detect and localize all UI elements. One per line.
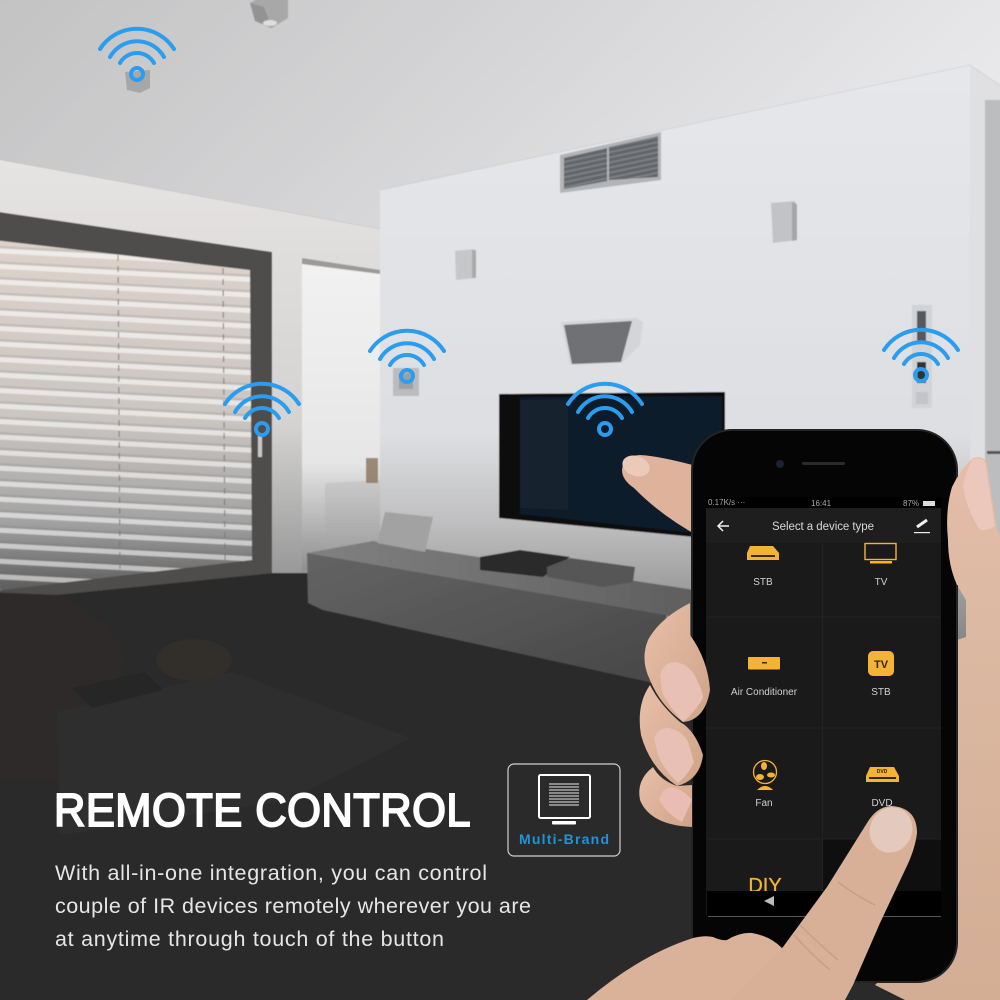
remotes on table: [72, 672, 163, 708]
fingernail 1: [660, 662, 703, 722]
black box: [480, 550, 570, 577]
status bar: [706, 497, 941, 508]
wifi icon: wall panel: [884, 330, 958, 381]
speaker: [802, 462, 845, 465]
badge label: Multi-Brand: [519, 831, 609, 847]
index fingernail: [862, 800, 920, 860]
edit icon: [914, 520, 930, 533]
device: air conditioner: [731, 657, 798, 698]
device: dvd: DVD: [877, 769, 888, 775]
description: [55, 861, 531, 951]
hand: palm behind phone: [875, 457, 1000, 1000]
status bar: 0.17K/s ···: [708, 498, 745, 507]
wifi icon: switch: [370, 331, 444, 382]
description: at anytime through touch of the button: [55, 927, 444, 951]
coffee table: [57, 672, 410, 835]
bowl on table: [156, 639, 232, 681]
upper fingertip: [619, 452, 653, 480]
status bar: 87%: [903, 499, 919, 508]
wifi icon: tv: [568, 384, 642, 435]
grey box: [547, 558, 635, 587]
description: couple of IR devices remotely wherever you are: [55, 894, 531, 918]
wifi icon: window handle: [225, 384, 299, 435]
wall speaker right: [771, 201, 797, 243]
right wall edge and door: [970, 65, 1000, 700]
device: air conditioner: Air Conditioner: [731, 687, 798, 698]
fingernail 3: [659, 787, 692, 822]
device: tv box: STB: [871, 687, 891, 698]
ceiling: [0, 0, 1000, 229]
back arrow: [718, 521, 729, 531]
wifi icon: ceiling light: [100, 29, 174, 93]
ceiling spotlight: [250, 0, 288, 28]
description: With all-in-one integration, you can control: [55, 861, 487, 885]
device: tv box: TV: [874, 659, 889, 671]
device: dvd: DVD: [871, 798, 893, 809]
left wall: [0, 157, 380, 602]
device: fan: Fan: [755, 798, 773, 809]
camera: [776, 460, 784, 468]
hand: pressing index finger: [587, 800, 920, 1000]
phone body: [692, 430, 957, 982]
header title: Select a device type: [772, 521, 874, 533]
icon: monitor: [539, 775, 590, 824]
finger 3: [639, 767, 692, 827]
hand: right finger over phone: [947, 457, 1000, 600]
wall switch panel: [393, 368, 419, 396]
finger creases: [794, 882, 875, 970]
wall speaker left: [455, 249, 476, 280]
android nav bar: [707, 891, 941, 917]
sofa: [0, 592, 122, 780]
finger 2: [640, 685, 703, 786]
right fingernail: [963, 458, 995, 530]
floor: [0, 573, 700, 1000]
wall-mounted tv: [499, 392, 725, 540]
device: diy: DIY: [748, 875, 782, 897]
device: dvd: [866, 767, 899, 809]
device: stb: [747, 546, 779, 588]
vase: [366, 458, 378, 483]
status bar: 16:41: [811, 499, 832, 508]
tablet on console: [377, 512, 433, 552]
device: stb: STB: [753, 577, 773, 588]
ventilation grille: [560, 132, 661, 193]
phone: [692, 430, 957, 982]
device: tv: TV: [875, 577, 888, 588]
screen: [706, 497, 941, 915]
finger 1: [644, 603, 710, 722]
window with blinds: [0, 210, 272, 602]
title: REMOTE CONTROL: [54, 784, 471, 836]
other fingers: [587, 933, 782, 1000]
main wall: [380, 65, 970, 700]
hand: upper finger behind phone: [619, 452, 700, 537]
screen header: [706, 508, 941, 543]
empty grid cell: [823, 839, 941, 891]
fingernail 2: [654, 728, 694, 783]
angled centre speaker: [561, 318, 643, 365]
device: tv box: [868, 651, 894, 698]
grid dividers: [707, 543, 941, 891]
curtain: [302, 258, 380, 572]
device: tv: [865, 544, 896, 588]
tv console: [307, 512, 695, 682]
multi-brand badge: [508, 764, 620, 856]
wall panel right: [912, 305, 932, 408]
index finger: [730, 806, 917, 1000]
hand: left fingers over phone: [639, 603, 710, 827]
device: fan: [754, 760, 776, 809]
